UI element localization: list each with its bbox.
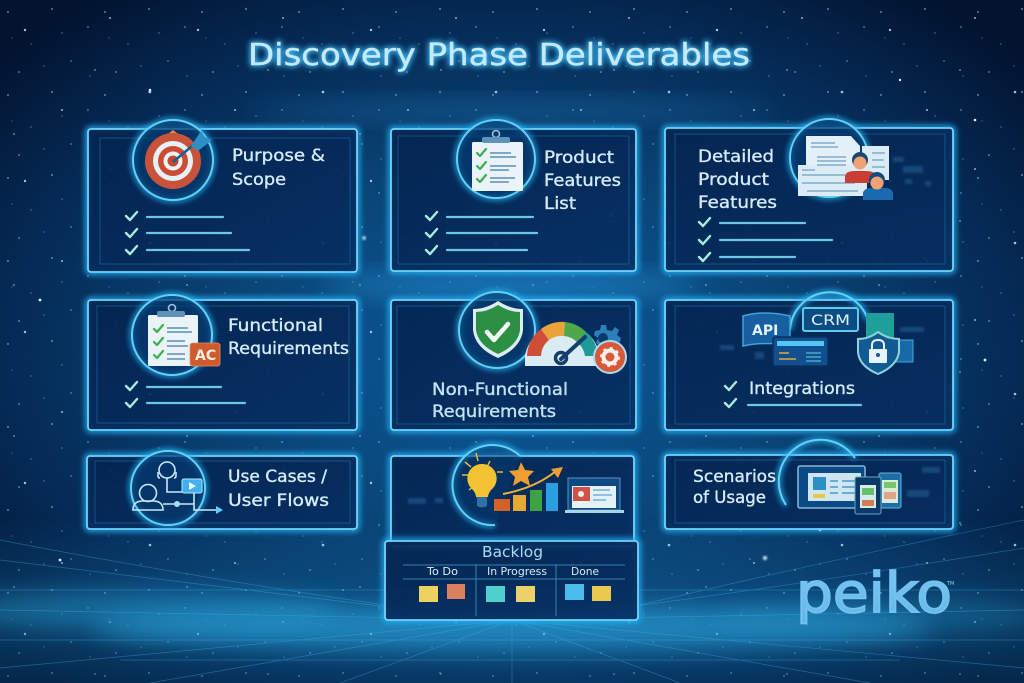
- label: [693, 467, 776, 508]
- panel: non-functional requirements: [391, 292, 636, 430]
- heading: backlog: Backlog: [482, 543, 543, 561]
- logo: peiko: peiko: [796, 561, 952, 625]
- panel: backlog board: [385, 541, 638, 620]
- icon: user flow diagram: [131, 451, 223, 525]
- checklist: [126, 382, 245, 407]
- icon: clipboard with AC badge: AC: [195, 348, 216, 364]
- icon: light bulb star and growth chart: [453, 445, 563, 525]
- panel: scenarios of usage: [665, 440, 953, 529]
- label: List: [544, 194, 576, 214]
- label: [698, 147, 777, 213]
- label: [432, 380, 568, 422]
- label: of Usage: [693, 488, 766, 508]
- column heads: In Progress: [487, 566, 547, 578]
- label: Non-Functional: [432, 380, 568, 400]
- icon: laptop: [565, 478, 624, 513]
- label: Functional: [228, 316, 323, 336]
- checklist: [699, 218, 832, 261]
- checklist: [126, 212, 249, 254]
- icon: API CRM card and lock: API: [752, 323, 778, 339]
- panel: purpose and scope: [88, 120, 357, 272]
- label: Integrations: [749, 379, 855, 399]
- panel: product features list: [391, 120, 636, 271]
- icon: clipboard with AC badge: [132, 295, 220, 375]
- column heads: Done: [571, 566, 599, 578]
- label: Use Cases /: [228, 467, 327, 487]
- panel: functional requirements: [88, 295, 357, 430]
- label: User Flows: [228, 491, 329, 511]
- label: Scenarios: [693, 467, 776, 487]
- label: [228, 467, 329, 511]
- icon: API CRM card and lock: CRM: [811, 313, 850, 329]
- label: Scope: [232, 170, 286, 190]
- checklist: [426, 212, 537, 254]
- title: Discovery Phase Deliverables: [248, 38, 750, 73]
- checklist: [725, 382, 861, 407]
- label: Purpose &: [232, 146, 325, 166]
- icon: performance gauge with gears: [525, 322, 626, 373]
- panel: prioritisation above backlog: [391, 445, 634, 546]
- logo: peiko: TM: [946, 581, 954, 587]
- panel: detailed product features: [665, 119, 953, 271]
- icon: API CRM card and lock: [743, 292, 913, 374]
- icon: monitor tablet and phone: [779, 440, 901, 514]
- column heads: [426, 566, 599, 578]
- icon: clipboard: [457, 120, 535, 198]
- label: Features: [698, 193, 777, 213]
- column heads: To Do: [426, 566, 458, 578]
- label: Requirements: [432, 402, 556, 422]
- label: Product: [544, 148, 614, 168]
- title: Discovery Phase Deliverables: [248, 38, 750, 73]
- label: Requirements: [228, 339, 349, 359]
- label: Features: [544, 171, 621, 191]
- label: [544, 148, 621, 214]
- label: Product: [698, 170, 769, 190]
- panel: integrations: [665, 292, 953, 430]
- label: [228, 316, 349, 359]
- icon: target with dart: [133, 120, 213, 200]
- label: [232, 146, 325, 190]
- label: Detailed: [698, 147, 774, 167]
- sticky notes: [419, 584, 611, 602]
- icon: documents and people: [790, 119, 893, 200]
- panel: use cases and user flows: [87, 451, 357, 529]
- icon: shield with check: [459, 292, 535, 368]
